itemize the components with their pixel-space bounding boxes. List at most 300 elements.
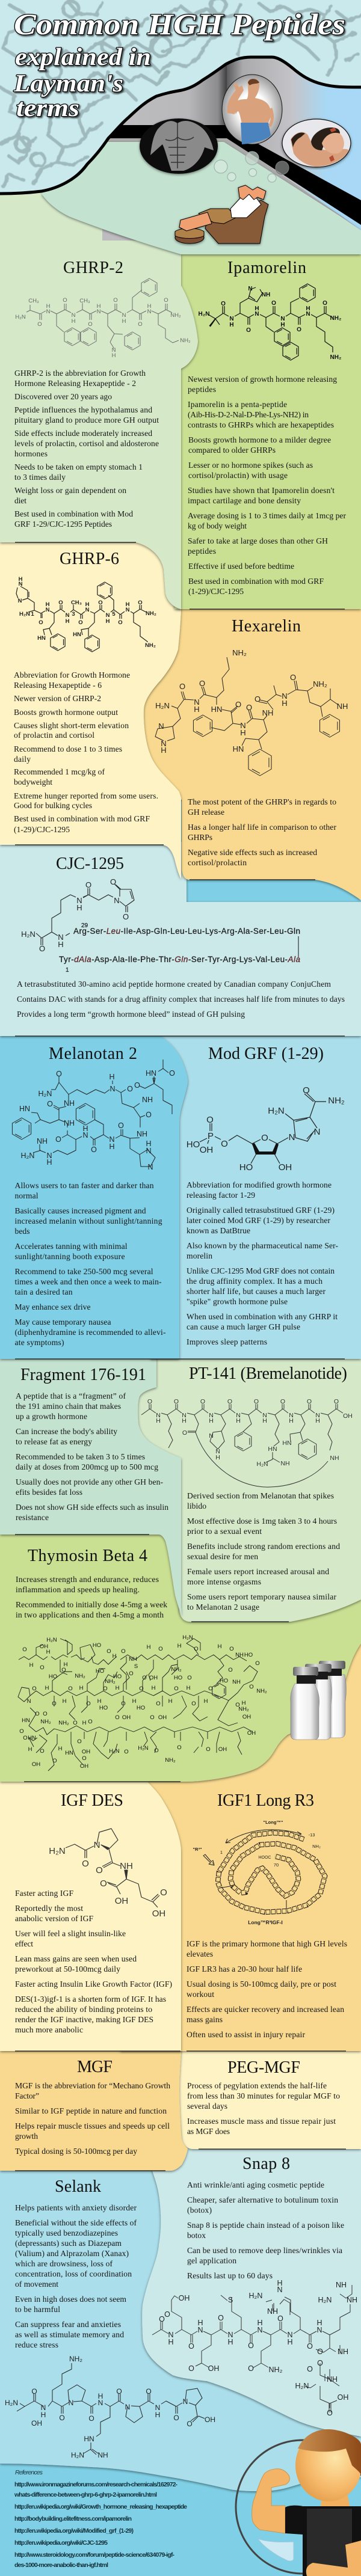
heading: CJC-1295: CJC-1295 [56, 854, 124, 873]
molecule: Selank: NH₂ [69, 2355, 82, 2363]
molecule: Thymosin Beta 4: HO [49, 1673, 57, 1680]
molecule: Thymosin Beta 4: O [22, 1646, 27, 1653]
text: Snap 8 facts [187, 2180, 344, 2280]
molecule: Hexarelin: H [194, 705, 200, 714]
molecule: PT-141: HN [268, 1446, 277, 1453]
molecule: PT-141: HN [282, 1440, 292, 1447]
molecule: Melanotan 2: N [82, 1131, 88, 1139]
molecule: GHRP-6: O [118, 619, 123, 626]
molecule: Selank: H₂N [5, 2399, 18, 2407]
text: Ipamorelin facts: Studies have shown that Ipamorelin doesn't [188, 486, 335, 495]
molecule: Thymosin Beta 4: H [97, 1698, 102, 1705]
references list: http://www.steroidology.com/forum/peptide-science/634079-igf- [14, 2551, 174, 2559]
text: Fragment facts: up a growth hormone [16, 1412, 87, 1421]
molecule: Thymosin Beta 4: O [77, 1738, 82, 1745]
text: Selank facts: Helps patients with anxiety disorder [15, 2203, 137, 2212]
text: PT-141 facts: more intense orgasms [187, 1577, 261, 1586]
molecule: Snap 8: N [227, 2331, 233, 2339]
title [13, 7, 345, 121]
molecule: GHRP-6: NH₂ [145, 642, 156, 649]
text: PEG-MGF facts: Process of pegylation extends the half-life [187, 2081, 327, 2090]
molecule: GHRP-6: HN [37, 635, 46, 642]
text: GHRP-2 facts: to 3 times daily [14, 473, 66, 482]
molecule: Melanotan 2: O [56, 1070, 62, 1078]
molecule: CJC-1295: N [58, 933, 64, 942]
text: GHRP-6 facts [14, 670, 158, 835]
molecule: PT-141: O [280, 1398, 285, 1405]
text: Hexarelin facts: Negative side effects such as increased [188, 848, 317, 857]
text: MGF facts: Helps repair muscle tissues and speeds up cell [15, 2121, 170, 2130]
text: IGF1 Long R3 facts: Usual dosing is 50-100mcg daily, pre or post [187, 1980, 336, 1989]
molecule: Hexarelin: HN [233, 744, 244, 753]
heading: IGF1 Long R3: IGF1 Long R3 [217, 1791, 314, 1810]
text: Selank facts: to be harmful [15, 2305, 60, 2314]
heading: Thymosin Beta 4: Thymosin Beta 4 [28, 1547, 147, 1565]
molecule: GHRP-2: H₂N [15, 314, 26, 320]
panel: Melanotan 2 [0, 1031, 345, 1359]
molecule: Selank: H [98, 2392, 103, 2400]
molecule: PT-141: N [182, 1412, 187, 1419]
molecule: Thymosin Beta 4: O [228, 1667, 233, 1673]
heading: IGF DES: IGF DES [61, 1791, 123, 1810]
molecule: Mod GRF: OH [279, 1162, 292, 1173]
text: MGF facts: MGF is the abbreviation for “Mechano Growth [15, 2081, 170, 2090]
panel: Thymosin Beta 4 [0, 1530, 361, 1782]
divider: Fragment bottom edge [15, 1534, 149, 1535]
text: Melanotan 2 facts: Basically causes increased pigment and [14, 1206, 146, 1215]
references list: http://www.ironmagazineforums.com/research-chemicals/162972- [14, 2481, 177, 2488]
molecule: Melanotan 2: NH [64, 1119, 75, 1127]
panel: IGF DES [0, 1774, 181, 2051]
text: Mod GRF facts: Unlike CJC-1295 Mod GRF does not contain [187, 1266, 335, 1275]
text: Snap 8 facts: Can be used to remove deep lines/wrinkles via [187, 2246, 342, 2255]
molecule: PT-141: H₂N [256, 1461, 268, 1468]
molecule: Selank: O [59, 2414, 65, 2422]
molecule: Thymosin Beta 4: HO [93, 1642, 101, 1649]
text: Selank facts: reduce stress [15, 2340, 58, 2349]
molecule: CJC-1295: H₂N [21, 930, 35, 939]
molecule: Selank: N [125, 2403, 130, 2411]
panel: CJC-1295 [0, 842, 361, 1036]
molecule: GHRP-6: CH₃ [71, 600, 82, 606]
references list [14, 2469, 187, 2569]
molecule: Mod GRF [187, 1085, 345, 1173]
title: Layman's [13, 69, 123, 97]
molecule: GHRP-2: N [122, 312, 126, 319]
heading: PEG-MGF: PEG-MGF [227, 2058, 300, 2077]
molecule: Snap 8: O [248, 2341, 254, 2350]
molecule: CJC-1295 [21, 877, 300, 974]
icon: flexing cartoon man [236, 2429, 361, 2576]
molecule: PT-141: H [289, 1417, 294, 1424]
text: MGF facts: Similar to IGF peptide in nature and function [15, 2106, 167, 2115]
molecule: GHRP-6: O [138, 600, 143, 606]
molecule: Hexarelin: NH₂ [313, 679, 327, 688]
molecule: Melanotan 2: N [146, 1147, 152, 1155]
text: Melanotan 2 facts: increased melanin without sunlight/tanning [14, 1216, 162, 1225]
molecule: Thymosin Beta 4: HO [96, 1668, 104, 1675]
text: PEG-MGF facts [187, 2081, 340, 2136]
text: Melanotan 2 facts: times a week and then once a week to main- [14, 1277, 162, 1286]
molecule: CJC-1295: N [114, 896, 120, 905]
molecule: Hexarelin: H [161, 746, 167, 755]
molecule: Hexarelin: NH [337, 702, 348, 711]
molecule: Snap 8: N [316, 2326, 322, 2334]
molecule: Thymosin Beta 4: OH [32, 1761, 40, 1768]
text: IGF1 Long R3 facts: Often used to assist in injury repair [187, 2030, 305, 2039]
molecule: IGF DES: O [100, 1878, 107, 1889]
text: IGF1 Long R3 facts [187, 1939, 347, 2039]
molecule: Thymosin Beta 4: NH₂ [40, 1719, 51, 1725]
molecule: Thymosin Beta 4: H [64, 1661, 68, 1668]
text: CJC-1295 facts: Provides a long term “growth hormone bleed” instead of GH pulsing [17, 1010, 245, 1019]
text: GHRP-2 facts: GHRP-2 is the abbreviation for Growth [14, 369, 146, 378]
molecule: Melanotan 2: HN [146, 1069, 156, 1078]
molecule: Melanotan 2: O [134, 1081, 140, 1090]
molecule: GHRP-2: N [97, 308, 101, 315]
text: Hexarelin facts [188, 797, 336, 867]
molecule: Thymosin Beta 4: H₂N [46, 1637, 57, 1643]
molecule: Snap 8: H [197, 2319, 203, 2327]
panel: Mod GRF (1-29) [150, 1031, 361, 1359]
molecule: Mod GRF: O [261, 1133, 268, 1143]
text: IGF1 Long R3 facts: IGF is the primary hormone that high GH levels [187, 1939, 347, 1948]
molecule: Thymosin Beta 4: H₂N [182, 1634, 193, 1641]
heading: Fragment 176-191: Fragment 176-191 [20, 1366, 146, 1384]
molecule: GHRP-6: N [19, 581, 23, 587]
text: IGF DES facts: render the IGF inactive, making IGF DES [15, 2015, 153, 2024]
references list: http://en.wikipedia.org/wiki/CJC-1295 [14, 2539, 108, 2547]
text: Selank facts: Beneficial without the side effects of [15, 2218, 137, 2227]
molecule: GHRP-6: H [85, 601, 90, 608]
panel: Hexarelin [120, 604, 361, 900]
title: explained in [15, 43, 151, 70]
molecule: Snap 8 [152, 2279, 357, 2417]
molecule: Snap 8: H [257, 2319, 263, 2327]
molecule: PT-141: O [182, 1429, 187, 1437]
header scene [0, 0, 361, 254]
text: GHRP-2 facts: Hormone Releasing Hexapeptide - 2 [14, 379, 136, 388]
molecule: Snap 8: O [248, 2364, 254, 2373]
molecule: Thymosin Beta 4: O [191, 1700, 196, 1707]
molecule: Thymosin Beta 4: O [154, 1747, 159, 1754]
text: Mod GRF facts: When used in combination with any GHRP it [187, 1312, 338, 1321]
divider: IGF DES bottom edge [15, 2050, 180, 2052]
molecule: PT-141: NH [330, 1455, 339, 1462]
molecule: Snap 8: O [317, 2359, 323, 2367]
molecule: Ipamorelin: N [280, 316, 285, 322]
molecule: GHRP-2: H [72, 318, 76, 325]
text: IGF DES facts [15, 1889, 172, 2034]
panel: Fragment 176-191 [0, 1353, 182, 1616]
molecule: Thymosin Beta 4: NH₂ [75, 1673, 85, 1679]
molecule: Melanotan 2: HN [19, 1105, 30, 1113]
molecule: Selank: O [88, 2414, 94, 2423]
molecule: Snap 8: H [277, 2279, 283, 2287]
text: Ipamorelin facts: Lesser or no hormone spikes (such as [188, 461, 313, 470]
text: PT-141 facts: to Melanotan 2 usage [187, 1602, 259, 1612]
molecule: CJC-1295: O [39, 944, 45, 953]
molecule: Ipamorelin: H₂N [199, 311, 209, 317]
text: GHRP-6 facts: Newer version of GHRP-2 [14, 694, 101, 703]
molecule: GHRP-2: H [112, 352, 116, 359]
molecule: PT-141: N [156, 1412, 161, 1419]
text: GHRP-2 facts: Discovered over 20 years ago [14, 392, 112, 401]
molecule: Thymosin Beta 4: HO [174, 1675, 182, 1681]
text: GHRP-6 facts: Causes slight short-term elevation [14, 721, 129, 730]
panel: Ipamorelin [174, 250, 361, 609]
text: Melanotan 2 facts: Accelerates tanning with minimal [14, 1242, 128, 1251]
text: IGF DES facts: effect [15, 1939, 33, 1948]
text: Selank facts: Even in high doses does not seem [15, 2295, 126, 2304]
molecule: Thymosin Beta 4: H₂N [138, 1745, 149, 1752]
text: IGF DES facts: DES(1-3)igf-1 is a shorten form of IGF. It has [15, 1995, 166, 2004]
chart: IGF1 amino acid spiral: "Long™" [264, 1820, 283, 1825]
text: CJC-1295 facts [17, 980, 345, 1019]
molecule: Thymosin Beta 4: H [82, 1720, 87, 1726]
molecule: Thymosin Beta 4: O [142, 1675, 147, 1681]
text: Snap 8 facts: Anti wrinkle/anti aging cosmetic peptide [187, 2180, 324, 2189]
text: PT-141 facts: prior to a sexual event [187, 1527, 262, 1536]
molecule: Selank: O [173, 2414, 179, 2422]
heading: Hexarelin: Hexarelin [232, 617, 301, 636]
molecule: Melanotan 2: H [109, 1142, 115, 1151]
chart: IGF1 amino acid spiral: HOOC [259, 1856, 271, 1860]
molecule: Thymosin Beta 4: H [58, 1746, 63, 1752]
molecule: Thymosin Beta 4: HN [28, 1735, 36, 1741]
molecule: Hexarelin: O [290, 673, 296, 682]
chart: IGF1 amino acid spiral: 3 [212, 1861, 214, 1866]
molecule: Ipamorelin: H [280, 322, 285, 328]
text: Hexarelin facts: GHRPs [188, 833, 212, 842]
text: GHRP-2 facts [14, 369, 159, 529]
molecule: Ipamorelin: O [297, 327, 301, 333]
molecule: Snap 8: O [327, 2409, 333, 2417]
molecule: Hexarelin: O [255, 695, 261, 704]
molecule: Thymosin Beta 4: O [121, 1648, 126, 1655]
molecule: PT-141: H [315, 1417, 320, 1424]
text: Ipamorelin facts: impact cartilage and bone density [188, 496, 301, 505]
chart: IGF1 amino acid spiral [193, 1820, 325, 1925]
molecule: PT-141: OH [343, 1412, 353, 1420]
molecule: PT-141: O [200, 1398, 205, 1405]
molecule: GHRP-6: 5 [112, 611, 116, 618]
text: Hexarelin facts: Has a longer half life in comparison to other [188, 823, 336, 832]
molecule: Snap 8: NH [338, 2348, 348, 2356]
molecule: IGF DES: O [160, 1888, 167, 1898]
heading: Ipamorelin: Ipamorelin [227, 259, 306, 277]
text: Ipamorelin facts: kg of body weight [188, 521, 247, 530]
text: Ipamorelin facts: peptides [188, 385, 216, 394]
molecule: Ipamorelin: N [306, 311, 310, 317]
molecule: PT-141: N [315, 1412, 320, 1419]
molecule: PT-141: O [307, 1398, 312, 1405]
molecule: Selank: OH [31, 2419, 42, 2427]
molecule: Hexarelin: HN [211, 705, 222, 714]
divider: Ipamorelin bottom edge [190, 609, 345, 610]
molecule: Thymosin Beta 4: HO [137, 1705, 145, 1711]
molecule: Selank: H [155, 2411, 160, 2419]
references list: des-1000-more-anabolic-than-igf.html [14, 2562, 108, 2569]
text: GHRP-2 facts: Needs to be taken on empty stomach 1 [14, 462, 143, 471]
text: MGF facts: Factor” [15, 2091, 39, 2100]
chart: IGF1 amino acid spiral: NH₂ [312, 1844, 321, 1849]
text: Melanotan 2 facts: Allows users to tan faster and darker than [14, 1181, 154, 1190]
text: GHRP-6 facts: Recommended 1 mcg/kg of [14, 767, 105, 776]
molecule: Ipamorelin: O [271, 300, 276, 307]
molecule: Snap 8: H [287, 2338, 293, 2346]
text: GHRP-6 facts: bodyweight [14, 777, 52, 787]
text: IGF DES facts: Reportedly the most [15, 1904, 83, 1913]
molecule: Hexarelin: O [246, 703, 252, 712]
molecule: Thymosin Beta 4: H [204, 1698, 208, 1705]
molecule: IGF DES: O [96, 1865, 103, 1875]
molecule: Thymosin Beta 4: O [52, 1700, 57, 1707]
text: GHRP-6 facts: Abbreviation for Growth Hormone [14, 670, 130, 679]
molecule: Thymosin Beta 4: O [88, 1719, 93, 1725]
molecule: Thymosin Beta 4: OH [149, 1675, 158, 1681]
molecule: PT-141: N [209, 1432, 214, 1440]
molecule: Hexarelin: H [240, 728, 246, 737]
molecule: GHRP-2: O [88, 321, 93, 328]
divider: Melanotan / Mod GRF bottom edge [15, 1358, 345, 1360]
molecule: Thymosin Beta 4: N [27, 1698, 31, 1705]
molecule: Snap 8: O [188, 2364, 194, 2373]
text: Mod GRF facts [187, 1180, 338, 1346]
molecule: Ipamorelin [199, 284, 341, 361]
molecule: Thymosin Beta 4: O [68, 1685, 73, 1692]
molecule: Selank: N [98, 2399, 103, 2407]
molecule: Snap 8: H₂N [249, 2292, 262, 2300]
molecule: Snap 8: NH [336, 2281, 347, 2289]
molecule: PT-141: H [209, 1417, 214, 1424]
molecule: PT-141: N [215, 1448, 220, 1455]
references list: http://en.wikipedia.org/wiki/Modified_grf_(1-29) [14, 2527, 134, 2535]
molecule: Thymosin Beta 4: H [177, 1643, 182, 1649]
molecule: Thymosin Beta 4: O [229, 1646, 234, 1652]
molecule: Ipamorelin: O [322, 300, 327, 307]
molecule: Melanotan 2: N [147, 1163, 153, 1171]
text: GHRP-2 facts: Best used in combination with Mod [14, 509, 133, 518]
molecule: Ipamorelin: O [246, 327, 251, 334]
molecule: CJC-1295: Arg-Ser-Leu-Ile-Asp-Gln-Leu-Leu-Lys-Arg-Ala-Ser-Leu-Gln [73, 927, 300, 936]
text: MGF facts [15, 2081, 170, 2156]
text: GHRP-2 facts: levels of prolactin, cortisol and aldosterone [14, 439, 159, 448]
text: Ipamorelin facts: Boosts growth hormone to a milder degree [188, 435, 331, 444]
molecule: GHRP-2: O [164, 297, 168, 304]
title: Common HGH Peptides [14, 7, 345, 41]
molecule: Snap 8: H [316, 2319, 322, 2327]
molecule: GHRP-6 [16, 576, 156, 652]
molecule: Thymosin Beta 4: H [187, 1685, 191, 1691]
molecule: Thymosin Beta 4: NH₂ [238, 1706, 249, 1713]
molecule: Mod GRF: HO [187, 1139, 200, 1150]
text: GHRP-6 facts: Recommend to dose 1 to 3 times [14, 744, 122, 753]
text: GHRP-6 facts: Releasing Hexapeptide - 6 [14, 681, 102, 690]
molecule: Thymosin Beta 4: O [121, 1700, 126, 1707]
molecule: Snap 8: S [228, 2296, 233, 2304]
molecule: Thymosin Beta 4: HO [244, 1652, 253, 1658]
text: Ipamorelin facts: Average dosing is 1 to 3 times daily at 1mcg per [188, 511, 346, 520]
text: Mod GRF facts: Originally called tetrasubstitued GRF (1-29) [187, 1206, 335, 1215]
molecule: Thymosin Beta 4: O [82, 1755, 87, 1762]
molecule: Selank [5, 2355, 215, 2459]
molecule: Snap 8: O [188, 2342, 194, 2351]
molecule: GHRP-6: N [126, 607, 130, 613]
molecule: Ipamorelin: N [248, 286, 253, 292]
chart: IGF1 amino acid spiral: "R³" [193, 1847, 202, 1852]
molecule: GHRP-6: N [106, 612, 110, 619]
molecule: Thymosin Beta 4: H [132, 1698, 137, 1705]
divider: PT-141 bottom edge [191, 1621, 289, 1622]
molecule: Thymosin Beta 4: O [40, 1664, 45, 1671]
molecule: Thymosin Beta 4: HO [99, 1705, 108, 1711]
molecule: Thymosin Beta 4: H [168, 1698, 173, 1705]
molecule: Selank: O [146, 2387, 152, 2396]
molecule: IGF DES: OH [152, 1909, 165, 1919]
text: Snap 8 facts: Results last up to 60 days [187, 2271, 273, 2280]
molecule: Thymosin Beta 4: H [242, 1700, 246, 1707]
text: Snap 8 facts: gel application [187, 2256, 236, 2265]
molecule: PT-141: O [227, 1398, 232, 1405]
text: Fragment facts [16, 1391, 168, 1522]
text: Selank facts: concentration, loss of coordination [15, 2269, 132, 2278]
molecule: Mod GRF: H₂N [268, 1106, 285, 1116]
molecule: PT-141: N [289, 1412, 294, 1419]
text: Mod GRF facts: Improves sleep patterns [187, 1337, 267, 1346]
molecule: Thymosin Beta 4: H [152, 1685, 156, 1691]
molecule: Snap 8: NH [267, 2307, 278, 2316]
text: Mod GRF facts: "spike" growth hormone pulse [187, 1297, 288, 1306]
molecule: Thymosin Beta 4: HN [65, 1750, 73, 1756]
text: Ipamorelin facts: (1-29)/CJC-1295 [188, 587, 244, 596]
molecule: Snap 8: N [168, 2331, 174, 2339]
text: Ipamorelin facts: Safer to take at large doses than other GH [188, 536, 328, 545]
molecule: Ipamorelin: NH₂ [330, 315, 341, 322]
molecule: Melanotan 2: NH [142, 1096, 153, 1104]
lower arm [306, 2541, 361, 2576]
molecule: Thymosin Beta 4: O [150, 1714, 155, 1721]
text: Ipamorelin facts: Effective if used before bedtime [188, 562, 294, 571]
ring [236, 2440, 361, 2574]
molecule: CJC-1295: N [76, 896, 82, 905]
molecule: Thymosin Beta 4: O [23, 1735, 28, 1741]
molecule: Selank: O [31, 2387, 37, 2396]
molecule: Thymosin Beta 4: H [113, 1653, 117, 1660]
text: GHRP-6 facts: daily [14, 755, 31, 764]
text: Hexarelin facts: GH release [188, 808, 224, 817]
molecule: Mod GRF: N [314, 1127, 320, 1137]
text: GHRP-6 facts: (1-29)/CJC-1295 [14, 825, 70, 835]
panel: IGF1 Long R3 [120, 1624, 361, 2051]
molecule: GHRP-2 [15, 278, 191, 359]
references list: References [15, 2469, 43, 2476]
molecule: Thymosin Beta 4: O [177, 1744, 182, 1751]
molecule: Selank: OH [205, 2415, 215, 2424]
molecule: Selank: O [116, 2387, 122, 2396]
text: PEG-MGF facts: as MGF does [187, 2127, 230, 2136]
chart: IGF1 amino acid spiral: 70 [274, 1862, 279, 1868]
text: Thymosin facts: Recommended to initially dose 4-5mg a week [16, 1600, 167, 1609]
molecule: GHRP-6: NH₂ [146, 610, 156, 617]
molecule: Thymosin Beta 4: H [29, 1662, 34, 1669]
molecule: IGF DES: OH [115, 1896, 128, 1906]
text: PT-141 facts: Most effective dose is 1mg taken 3 to 4 hours [187, 1516, 337, 1526]
molecule: Thymosin Beta 4: O [73, 1720, 78, 1726]
text: Hexarelin facts: cortisol/prolactin [188, 858, 247, 867]
molecule: Melanotan 2: NH [137, 1130, 147, 1138]
divider: MGF bottom edge [15, 2170, 165, 2171]
